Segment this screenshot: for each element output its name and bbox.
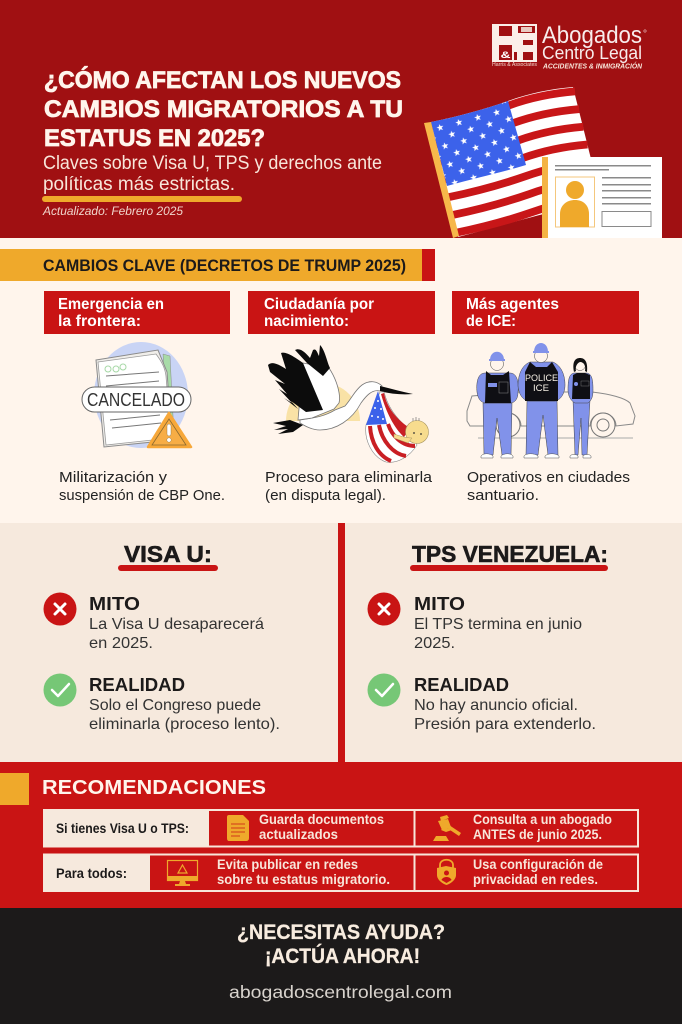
myth text: en 2025. (89, 635, 153, 652)
panel: footer (0, 908, 682, 1024)
call to action: ¡ACTÚA AHORA! (265, 944, 420, 968)
section heading: CAMBIOS CLAVE (DECRETOS DE TRUMP 2025) (43, 256, 406, 275)
card heading: ice: Más agentes (466, 296, 559, 313)
icon: myth x (368, 592, 400, 626)
row: visa u o tps: Si tienes Visa U o TPS: (56, 821, 189, 836)
myth text (89, 594, 264, 652)
card heading: emergencia (44, 291, 230, 334)
panel: recomendaciones (0, 762, 682, 908)
title: ¿CÓMO AFECTAN LOS NUEVOS (44, 66, 401, 94)
caption: emergencia: Militarización y (59, 469, 168, 486)
myth text: La Visa U desaparecerá (89, 616, 264, 633)
myth text: MITO (89, 594, 140, 614)
title: ESTATUS EN 2025? (44, 125, 265, 152)
row: para todos: privacidad en redes. (473, 872, 598, 887)
icon: ice agents (467, 343, 635, 458)
panel: visa u (0, 523, 338, 762)
row: visa u o tps: actualizados (259, 827, 338, 842)
officer left (477, 352, 518, 458)
reality text: Presión para extenderlo. (414, 716, 596, 733)
officer center (518, 343, 565, 458)
accent square (0, 773, 29, 805)
icon: cancelled document: CANCELADO (87, 389, 185, 410)
myth text: 2025. (414, 635, 455, 652)
subtitle: Claves sobre Visa U, TPS y derechos ante (43, 153, 382, 174)
icon: privacy lock (437, 860, 456, 885)
call to action: ¿NECESITAS AYUDA? (237, 921, 445, 944)
caption: ice: Operativos en ciudades (467, 469, 630, 486)
icon: id card (542, 157, 662, 239)
icon: reality check (368, 674, 400, 706)
subtitle: políticas más estrictas. (43, 174, 235, 195)
logo: & (500, 50, 511, 60)
subtitle underline (42, 196, 242, 202)
card heading: emergencia: Emergencia en (58, 296, 164, 313)
update date: Actualizado: Febrero 2025 (42, 206, 184, 218)
call to action (237, 921, 445, 968)
caption: ciudadania: (en disputa legal). (265, 487, 386, 504)
myth text: El TPS termina en junio (414, 616, 582, 633)
caption: ice: santuario. (467, 487, 539, 504)
icon: reality check (44, 674, 76, 706)
subtitle (43, 153, 382, 195)
card heading: ciudadania: nacimiento: (264, 313, 349, 330)
icon: myth x (44, 592, 76, 626)
heading: RECOMENDACIONES (42, 776, 266, 799)
title: CAMBIOS MIGRATORIOS A TU (44, 96, 403, 123)
reality text (89, 675, 280, 733)
row: para todos: Evita publicar en redes (217, 857, 358, 872)
card heading: ice: de ICE: (466, 313, 516, 330)
icon: stork with baby (268, 345, 428, 462)
heading: tps: TPS VENEZUELA: (412, 541, 608, 567)
card heading: ciudadania: Ciudadanía por (264, 296, 374, 313)
reality text: eliminarla (proceso lento). (89, 716, 280, 733)
logo: ACCIDENTES & INMIGRACIÓN (542, 62, 643, 70)
section heading (0, 249, 435, 281)
icon: cancelled document (82, 342, 191, 448)
row: para todos: Para todos: (56, 866, 127, 881)
reality text: Solo el Congreso puede (89, 697, 261, 714)
icon: monitor warning (167, 860, 198, 886)
officer center: ICE (533, 383, 549, 394)
reality text: No hay anuncio oficial. (414, 697, 578, 714)
logo: Centro Legal (542, 43, 642, 63)
card heading: emergencia: la frontera: (58, 313, 141, 330)
row: para todos: Usa configuración de (473, 857, 603, 872)
logo: Harris & Associates (492, 62, 538, 68)
caption: ciudadania (265, 469, 433, 504)
caption: ice (467, 469, 630, 504)
row: para todos: sobre tu estatus migratorio. (217, 872, 390, 887)
row: visa u o tps: Guarda documentos (259, 812, 384, 827)
title (44, 66, 403, 152)
row: visa u o tps (44, 810, 638, 847)
reality text (414, 675, 596, 733)
panel: cambios clave (0, 238, 682, 523)
officer right (568, 358, 593, 458)
card heading: ciudadania (248, 291, 435, 334)
row: para todos (44, 854, 638, 891)
row: visa u o tps: Consulta a un abogado (473, 812, 612, 827)
heading: visa u: VISA U: (124, 541, 212, 567)
reality text: REALIDAD (89, 675, 185, 695)
logo: Abogados (542, 22, 642, 49)
icon: american flag (424, 87, 602, 238)
logo (492, 22, 646, 70)
icon: document (227, 815, 249, 841)
panel: header (0, 0, 682, 239)
caption: emergencia (59, 469, 225, 504)
icon: gavel (433, 815, 461, 841)
officer center: POLICE (525, 373, 558, 384)
card heading: ice (452, 291, 639, 334)
myth text (414, 594, 582, 652)
row: visa u o tps: ANTES de junio 2025. (473, 827, 602, 842)
panel: tps venezuela (345, 523, 682, 762)
website: abogadoscentrolegal.com (229, 982, 452, 1002)
reality text: REALIDAD (414, 675, 509, 695)
myth text: MITO (414, 594, 465, 614)
caption: ciudadania: Proceso para eliminarla (265, 469, 433, 486)
divider (338, 523, 345, 762)
caption: emergencia: suspensión de CBP One. (59, 487, 225, 504)
